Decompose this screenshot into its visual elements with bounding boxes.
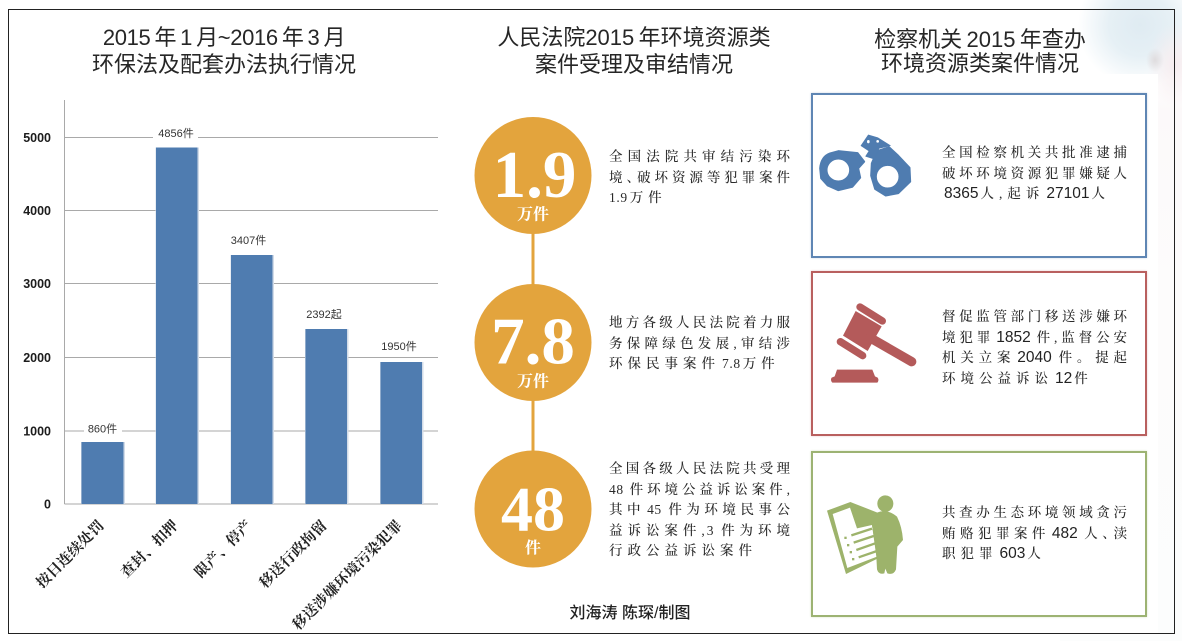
- text: case 48: [609, 461, 790, 558]
- icon: handcuffs: [819, 134, 912, 196]
- bar chart: 4856件: [158, 127, 194, 140]
- panel: supervision: [811, 271, 1147, 436]
- heading: courts: [497, 25, 771, 77]
- circles timeline: 1.9: [493, 138, 576, 212]
- icon: gavel: [831, 303, 916, 383]
- text: case 1.9: 1.9万件: [609, 190, 667, 205]
- background: watercolor decoration: [1060, 0, 1182, 641]
- circles timeline: 7.8: [491, 304, 575, 378]
- text: case 7.8: 地方各级人民法院着力服: [609, 315, 790, 330]
- bar chart: 限产、停产: [191, 516, 256, 581]
- text: case 1.9: 境、破坏资源等犯罪案件: [609, 170, 790, 185]
- text: supervision: [942, 309, 1127, 387]
- bar chart: 按日连续处罚: [32, 516, 108, 592]
- text: case 48: 48件环境公益诉讼案件,: [609, 482, 790, 497]
- bar chart: 1950件: [381, 340, 417, 353]
- circles timeline: 48: [501, 474, 565, 544]
- bar chart: 4000: [23, 204, 51, 218]
- heading: courts: 案件受理及审结情况: [535, 52, 733, 77]
- bar chart: 移送涉嫌环境污染犯罪: [288, 516, 406, 633]
- text: supervision: 境犯罪1852件,监督公安: [942, 329, 1127, 346]
- text: case 1.9: [609, 149, 790, 205]
- text: case 48: 全国各级人民法院共受理: [609, 461, 790, 476]
- text: supervision: 机关立案2040件。提起: [942, 349, 1127, 366]
- panel: arrests: [811, 93, 1147, 258]
- text: case 1.9: 全国法院共审结污染环: [609, 149, 790, 164]
- text: corruption: 贿赂犯罪案件482人、渎: [942, 525, 1127, 542]
- heading: procuratorate: [874, 27, 1086, 76]
- text: corruption: [942, 505, 1127, 562]
- heading: law enforcement: [92, 25, 356, 77]
- icon: person with document: [827, 495, 903, 574]
- bar chart: 2392起: [306, 308, 342, 321]
- heading: law enforcement: 2015 年 1 月~2016 年 3 月: [103, 25, 345, 50]
- text: corruption: 职犯罪603人: [942, 545, 1046, 562]
- circles timeline: 件: [525, 539, 541, 557]
- text: arrests: 8365人,起诉27101人: [944, 185, 1110, 202]
- circles timeline: 万件: [517, 206, 549, 224]
- heading: courts: 人民法院2015 年环境资源类: [497, 25, 771, 50]
- circles timeline: 万件: [517, 372, 549, 390]
- text: supervision: 督促监管部门移送涉嫌环: [942, 309, 1127, 324]
- text: arrests: 全国检察机关共批准逮捕: [942, 145, 1127, 160]
- text: case 48: 其中45件为环境民事公: [609, 502, 790, 517]
- text: supervision: 环境公益诉讼12件: [942, 370, 1093, 387]
- bar chart: 2000: [23, 351, 51, 365]
- panel: corruption: [811, 451, 1147, 617]
- text: case 48: 益诉讼案件,3件为环境: [609, 523, 790, 538]
- heading: procuratorate: 环境资源类案件情况: [881, 51, 1079, 76]
- bar chart: 查封、扣押: [117, 516, 182, 581]
- text: case 7.8: 务保障绿色发展,审结涉: [609, 336, 790, 351]
- credit: 刘海涛 陈琛/制图: [570, 605, 690, 622]
- text: case 7.8: 环保民事案件7.8万件: [609, 356, 780, 371]
- heading: law enforcement: 环保法及配套办法执行情况: [92, 52, 356, 77]
- bar chart: 5000: [23, 131, 51, 145]
- text: case 48: 行政公益诉讼案件: [609, 543, 757, 558]
- bar chart: 1000: [23, 424, 51, 438]
- bar chart: 3000: [23, 277, 51, 291]
- text: corruption: 共查办生态环境领域贪污: [942, 505, 1127, 520]
- bar chart: 移送行政拘留: [255, 516, 331, 592]
- bar chart: 3407件: [231, 234, 266, 247]
- text: case 7.8: [609, 315, 790, 371]
- bar chart: 0: [44, 498, 51, 512]
- bar chart: 860件: [88, 422, 117, 436]
- heading: procuratorate: 检察机关 2015 年查办: [874, 27, 1086, 52]
- text: arrests: [942, 145, 1127, 202]
- text: arrests: 破坏环境资源犯罪嫌疑人: [942, 166, 1127, 181]
